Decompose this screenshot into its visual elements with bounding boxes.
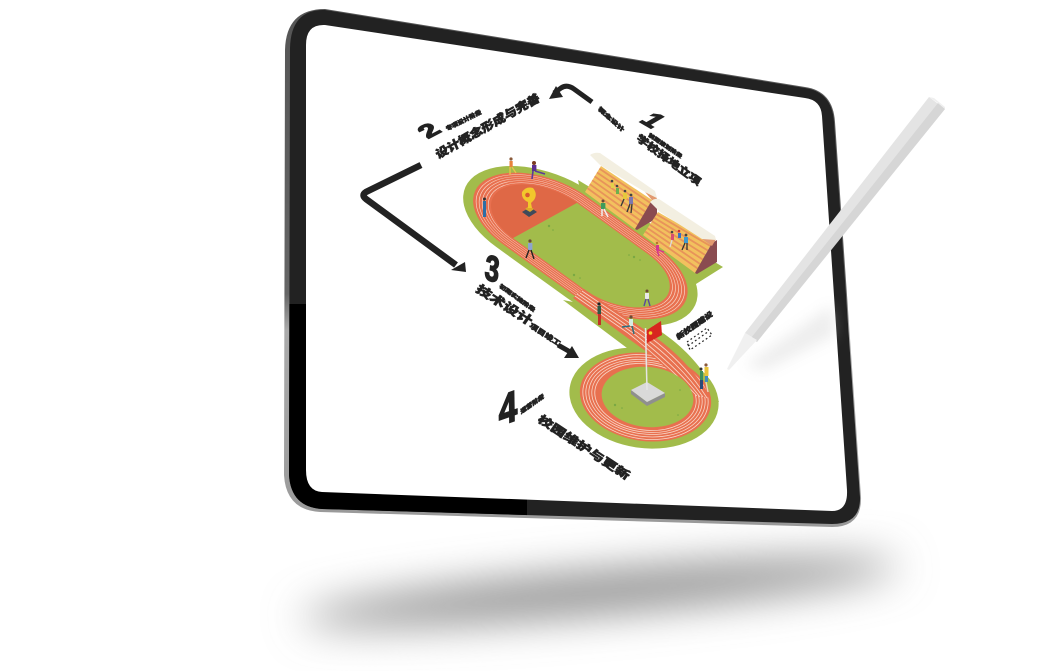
- number 4: 4: [498, 382, 518, 436]
- runner magenta: [656, 242, 664, 256]
- runner centre: [644, 290, 650, 306]
- ground shadow: [299, 546, 901, 638]
- grass tufts: [548, 225, 681, 416]
- green under circular field and connector: [563, 300, 725, 458]
- stylus body: [745, 97, 945, 340]
- stylus end cap: [929, 97, 945, 109]
- label project completion: 项目竣工: [528, 321, 562, 348]
- step 2 heading: 设计概念形成与完善: [434, 90, 542, 162]
- dashed plot: [687, 328, 712, 350]
- number 1: 1: [633, 109, 673, 132]
- running track illustration: [431, 146, 730, 458]
- tablet bezel: [289, 10, 860, 524]
- runner orange: [509, 157, 516, 175]
- number 3: 3: [483, 247, 501, 291]
- step 2 stage label: 专项设计阶段: [445, 108, 483, 133]
- person red trousers: [597, 302, 601, 325]
- stand one: [585, 153, 657, 230]
- step 2: [411, 90, 542, 162]
- stylus shaded facet: [751, 103, 945, 342]
- step 4: [498, 382, 633, 482]
- tablet metal edge: [284, 9, 861, 527]
- pen shadow on screen: [745, 305, 835, 370]
- runner green shirt: [601, 200, 608, 217]
- step 3 heading: 技术设计: [474, 282, 535, 328]
- stylus tip: [727, 333, 757, 370]
- tablet: [280, 9, 861, 530]
- screen: [306, 25, 847, 511]
- step 4 stage label: 运营阶段: [520, 391, 545, 416]
- step 4 heading: 校园维护与更新: [536, 412, 633, 482]
- figures: [483, 157, 708, 392]
- runner purple: [532, 161, 545, 179]
- arrow 3 to 4 with label: [528, 321, 579, 358]
- runner teal: [622, 315, 634, 334]
- ground behind stands: [578, 180, 723, 305]
- stand two: [643, 199, 717, 274]
- seated spectators: [611, 180, 633, 213]
- step 1 heading: 学校择地立项: [635, 132, 703, 189]
- step 3: [474, 247, 537, 328]
- trophy: [522, 188, 537, 217]
- people by circle: [700, 363, 708, 392]
- stylus: [727, 97, 945, 370]
- circular track and connector: [573, 289, 717, 450]
- step 1: [633, 109, 703, 189]
- stadium track: [431, 146, 730, 346]
- runner blue shirt: [526, 239, 534, 259]
- stand two spectators: [670, 230, 688, 250]
- person blue: [483, 198, 486, 217]
- step 1 stage label: 前期策划阶段: [647, 132, 684, 160]
- arrow 2 to 3: [364, 165, 466, 272]
- arrow 1 to 2 with label: [549, 86, 625, 134]
- flag and base: [631, 321, 665, 406]
- label concept design: 概念设计: [597, 105, 625, 134]
- step 3 stage label: 初期实施阶段: [498, 282, 537, 314]
- number 2: 2: [411, 119, 447, 142]
- new campus label and plot: 新校园建设: [675, 309, 714, 342]
- bezel reflection: [280, 304, 527, 530]
